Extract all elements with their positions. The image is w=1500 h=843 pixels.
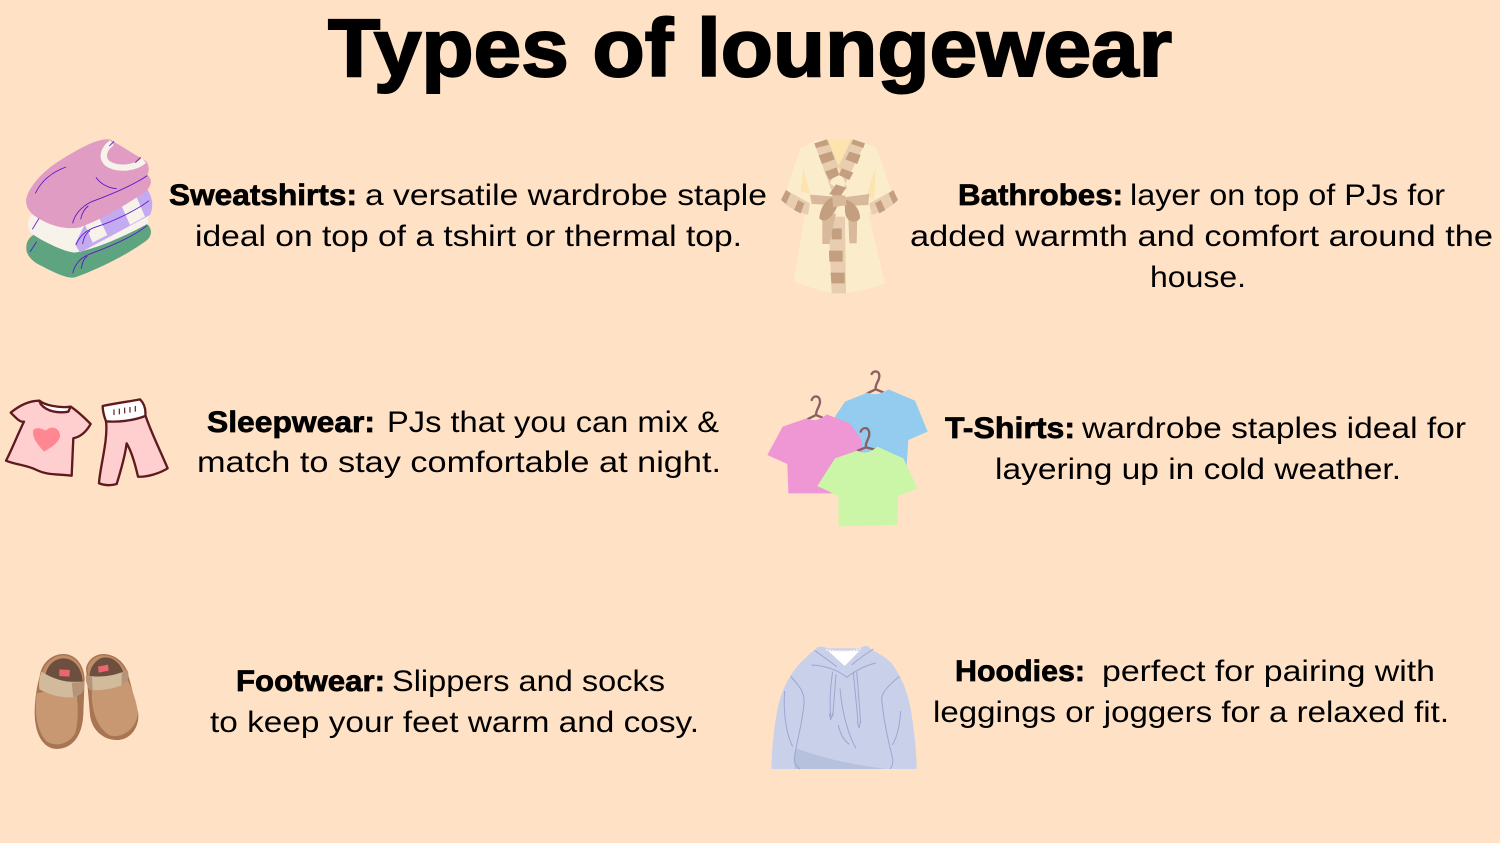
text: t-shirts [945,412,1466,486]
text: footwear: Slippers and socks [392,665,665,698]
text: t-shirts: T-Shirts: [945,412,1075,445]
text: footwear: to keep your feet warm and cosy. [210,706,699,739]
text: bathrobes: Bathrobes: [958,179,1123,212]
text: bathrobes [910,179,1493,294]
text: bathrobes: added warmth and comfort around the [910,220,1493,253]
text: footwear: Footwear: [236,665,385,698]
text: t-shirts: layering up in cold weather. [995,453,1401,486]
icon: bathrobe [781,139,898,293]
text: t-shirts: wardrobe staples ideal for [1081,412,1466,445]
text: footwear [210,665,699,739]
text: hoodies: leggings or joggers for a relaxed fit. [933,696,1449,729]
icon: pyjama top and trousers [6,399,168,485]
text: sleepwear: Sleepwear: [207,406,375,439]
text: sweatshirts: ideal on top of a tshirt or thermal top. [195,220,742,253]
icon: stacked sweatshirts [26,139,152,278]
text: bathrobes: house. [1150,261,1246,294]
text: hoodies: perfect for pairing with [1102,655,1435,688]
text: sweatshirts [169,179,767,253]
text: sweatshirts: a versatile wardrobe staple [365,179,767,212]
text: sleepwear: PJs that you can mix & [387,406,719,439]
text: bathrobes: layer on top of PJs for [1130,179,1445,212]
text: hoodies [933,655,1449,729]
icon: slippers [35,654,138,749]
icon: hoodie [771,646,917,769]
text: hoodies: Hoodies: [955,655,1085,688]
icon: t-shirts on hangers [767,371,928,526]
collar [104,143,144,168]
text: sweatshirts: Sweatshirts: [169,179,357,212]
text: sleepwear: match to stay comfortable at night. [197,446,721,479]
text: sleepwear [197,406,721,479]
title: Types of loungewear [328,3,1172,94]
